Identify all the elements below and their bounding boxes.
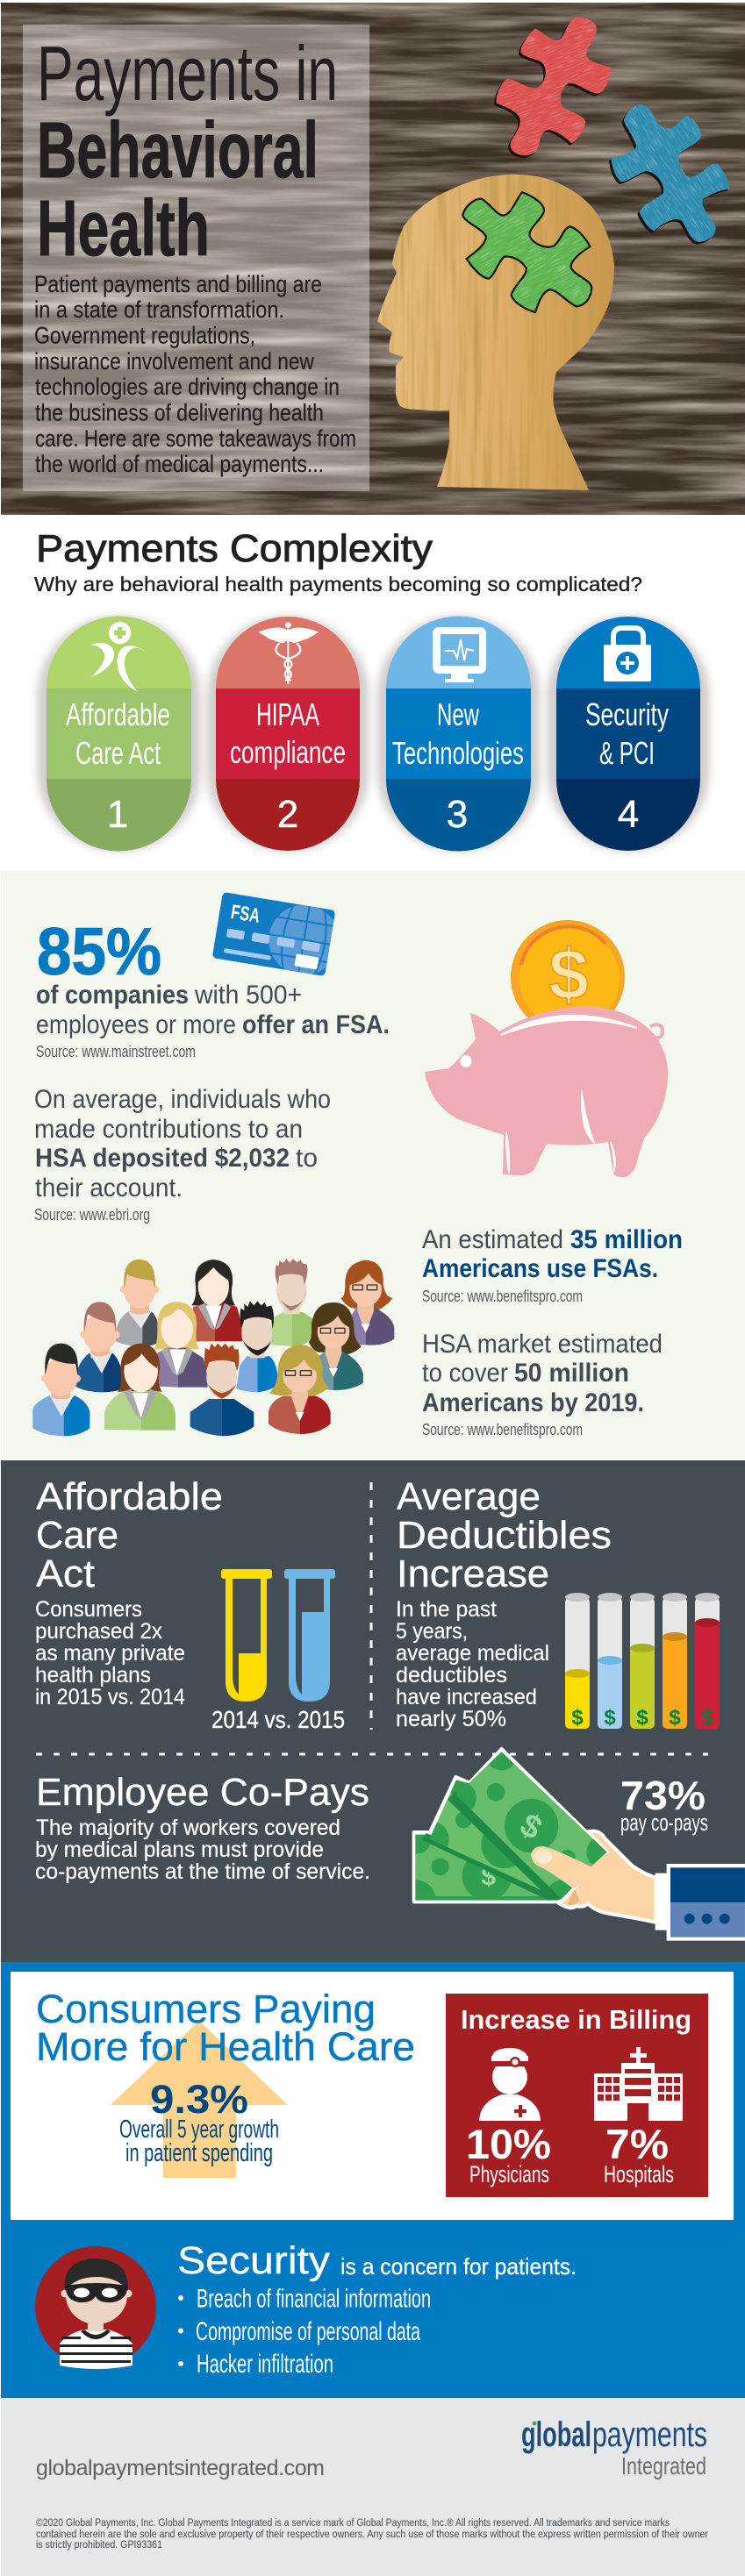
icon: monitor [433, 627, 486, 682]
stat: 85 percent: employees or more [36, 1010, 236, 1039]
stat: hsa deposit: Source: www.ebri.org [34, 1206, 150, 1224]
stat: 85 percent: with 500+ [194, 981, 302, 1010]
text: majority of workers [35, 1816, 370, 1884]
icon: fsa card [212, 893, 335, 975]
title panel [23, 25, 369, 491]
icon: piggy bank with coin [425, 920, 668, 1177]
icon: red puzzle piece [494, 17, 612, 158]
stat: 85 percent: offer an FSA. [242, 1010, 390, 1039]
chart: deductible cylinders: $ [571, 1706, 584, 1730]
chart: test tubes: 2014 vs. 2015 [211, 1706, 345, 1733]
icon: piggy bank with coin: $ [548, 935, 589, 1015]
intro text: technologies are driving change in [35, 374, 340, 400]
intro text: Patient payments and billing are [34, 271, 322, 297]
text: consumers purchased: Consumers [35, 1597, 142, 1622]
chart: deductible cylinders: $ [669, 1706, 681, 1730]
stat: 85 percent: 85% [37, 915, 161, 989]
stat: 9.3 percent [119, 2077, 279, 2167]
title [37, 30, 338, 273]
text: majority of workers: The majority of workers covered [36, 1816, 340, 1840]
list of concerns: Compromise of personal data [196, 2317, 420, 2346]
pill: new technologies: New [437, 696, 480, 732]
text: in the past 5 years: 5 years, [396, 1619, 468, 1644]
stat: 85 percent [36, 915, 390, 1060]
stat: 73 percent [620, 1773, 708, 1836]
title: Behavioral [37, 107, 319, 195]
stat: 50 million: Source: www.benefitspro.com [422, 1421, 583, 1438]
pill: hipaa compliance: compliance [230, 734, 346, 770]
stat: hsa deposit [34, 1085, 331, 1224]
stat: 50 million: HSA market estimated [422, 1330, 663, 1359]
icon: thief [35, 2246, 156, 2369]
stat: 35 million [422, 1225, 683, 1305]
panel: increase in billing: 10% [466, 2121, 551, 2167]
panel: increase in billing: Hospitals [604, 2161, 674, 2187]
pill: affordable care act [38, 617, 200, 851]
icon: blue puzzle piece [609, 104, 730, 245]
list of concerns: Breach of financial information [197, 2284, 431, 2314]
heading: average deductibles increase: Deductibles [397, 1514, 612, 1557]
icon: hospital [594, 2047, 683, 2121]
front bill [456, 1752, 607, 1899]
intro text: the business of delivering health [35, 400, 324, 426]
stat: 50 million: to cover [422, 1359, 508, 1388]
pill: security and pci: & PCI [599, 735, 655, 771]
logo: global [521, 2415, 591, 2454]
pill: affordable care act: 1 [107, 793, 128, 836]
stat: 50 million: Americans by 2019. [422, 1388, 644, 1417]
heading: affordable care act: Care [36, 1514, 118, 1557]
icon: doctor [479, 2048, 541, 2121]
title: Payments in [37, 30, 338, 117]
stat: 85 percent: of companies [36, 981, 189, 1010]
icon: person with plus [90, 622, 147, 691]
heading: More for Health Care [36, 2024, 415, 2069]
text: consumers purchased: as many private [35, 1641, 185, 1666]
back bill: $ [481, 1862, 496, 1891]
pill: hipaa compliance: HIPAA [256, 696, 319, 732]
text: security [177, 2239, 577, 2379]
heading: affordable care act: Affordable [36, 1475, 223, 1518]
stat: hsa deposit: HSA deposited $2,032 [35, 1144, 290, 1173]
heading: average deductibles increase [397, 1475, 612, 1595]
stat: 50 million [422, 1330, 663, 1438]
panel: payments complexity [34, 527, 709, 851]
subheading: Why are behavioral health payments becoming so complicated? [34, 573, 642, 596]
text: majority of workers: co-payments at the time of service. [35, 1859, 370, 1884]
middle bill [430, 1780, 562, 1901]
heading: affordable care act [36, 1475, 223, 1595]
heading: average deductibles increase: Increase [397, 1552, 549, 1595]
middle row of people [75, 1301, 363, 1392]
stat: 35 million: An estimated [422, 1225, 563, 1254]
pill: security and pci: 4 [618, 793, 639, 836]
text: security: Security [177, 2239, 330, 2282]
intro text: in a state of transformation. [34, 296, 284, 323]
pill: hipaa compliance: 2 [277, 793, 298, 836]
text: in the past 5 years: have increased [396, 1685, 537, 1709]
legal text: is strictly prohibited. GPI93361 [36, 2540, 162, 2551]
stat: 85 percent: Source: www.mainstreet.com [36, 1043, 196, 1060]
illustration: group of people [32, 1259, 394, 1436]
pill: new technologies [377, 616, 540, 851]
text: consumers purchased [35, 1597, 185, 1709]
stat: 73 percent: pay co-pays [620, 1809, 708, 1836]
panel: fsa and hsa statistics [1, 871, 745, 1459]
intro text: care. Here are some takeaways from [35, 425, 356, 452]
chart: deductible cylinders: $ [636, 1706, 648, 1730]
icon: caduceus [258, 622, 319, 684]
list of concerns [178, 2284, 431, 2379]
chart: deductible cylinders [565, 1593, 720, 1730]
stat: hsa deposit: made contributions to an [34, 1115, 303, 1144]
text: consumers purchased: in 2015 vs. 2014 [35, 1685, 185, 1709]
pill: affordable care act: Affordable [66, 696, 170, 732]
back row of people [114, 1259, 394, 1346]
front row of people [32, 1344, 331, 1436]
stat: hsa deposit: their account. [35, 1174, 183, 1202]
divider lines [370, 1482, 372, 1730]
stat: 73 percent: 73% [620, 1773, 706, 1818]
text: security: is a concern for patients. [340, 2253, 577, 2280]
panel: increase in billing: Physicians [469, 2161, 549, 2187]
text: in the past 5 years: deductibles [396, 1663, 507, 1688]
panel: increase in billing: Increase in Billing [461, 2004, 691, 2035]
thumb [531, 1846, 608, 1888]
logo [521, 2415, 707, 2480]
illustration: hand with money [395, 1738, 745, 1941]
icon: up arrow [111, 2021, 288, 2178]
intro text: Government regulations, [34, 323, 255, 349]
panel: increase in billing [446, 1994, 708, 2197]
stat: 35 million: 35 million [570, 1225, 683, 1254]
panel: footer [1, 2398, 745, 2576]
text: consumers purchased: purchased 2x [35, 1619, 162, 1644]
pill: security and pci [548, 617, 709, 851]
intro text: insurance involvement and new [34, 348, 314, 375]
text: majority of workers: by medical plans must provide [35, 1837, 324, 1862]
pill: affordable care act: Care Act [75, 735, 161, 771]
title: Health [37, 185, 210, 273]
pill: security and pci: Security [585, 696, 669, 732]
website url: globalpaymentsintegrated.com [36, 2456, 325, 2480]
panel: consumers paying more [1, 1962, 745, 2398]
intro text: the world of medical payments... [35, 451, 324, 477]
text: in the past 5 years: In the past [396, 1597, 497, 1622]
legal text: contained herein are the sole and exclusive property of their respective owners. Any such use of those marks without the express written permission of their owner [36, 2530, 708, 2540]
panel: increase in billing: 7% [605, 2121, 669, 2167]
text: in the past 5 years: average medical [396, 1641, 549, 1666]
heading: average deductibles increase: Average [397, 1475, 541, 1518]
text: in the past 5 years: nearly 50% [396, 1707, 506, 1731]
chart: test tubes [211, 1569, 345, 1733]
panel: dark statistics [1, 1460, 745, 1963]
icon: shirt cuff [655, 1864, 745, 1941]
panel: hero [1, 0, 745, 515]
heading: Consumers Paying [36, 1987, 376, 2031]
stat: hsa deposit: On average, individuals who [34, 1085, 331, 1114]
list of concerns: Hacker infiltration [197, 2350, 333, 2379]
pill: new technologies: Technologies [392, 735, 524, 771]
chart: deductible cylinders: $ [701, 1706, 713, 1730]
front bill: $ [514, 1806, 548, 1846]
logo: payments [592, 2415, 707, 2454]
legal text [36, 2518, 708, 2551]
back bill [415, 1833, 560, 1901]
stat: hsa deposit: to [296, 1144, 318, 1173]
icon: wooden head [373, 171, 619, 496]
heading: Payments Complexity [36, 527, 433, 570]
stat: 9.3 percent: 9.3% [150, 2077, 248, 2122]
heading [36, 1987, 415, 2069]
stat: 35 million: Source: www.benefitspro.com [422, 1288, 583, 1305]
icon: fsa card: FSA [229, 900, 261, 927]
text: consumers purchased: health plans [35, 1663, 151, 1688]
legal text: ©2020 Global Payments, Inc. Global Payments Integrated is a service mark of Global Payments, Inc.® All rights reserved. All trademarks and service marks [36, 2518, 670, 2529]
text: in the past 5 years [396, 1597, 549, 1731]
intro text [34, 271, 356, 477]
hand back [559, 1831, 655, 1923]
stat: 9.3 percent: Overall 5 year growth [119, 2116, 279, 2144]
stat: 9.3 percent: in patient spending [125, 2139, 273, 2167]
icon: green puzzle piece [462, 191, 593, 314]
stat: 35 million: Americans use FSAs. [422, 1254, 658, 1283]
heading: employee co-pays: Employee Co-Pays [36, 1771, 369, 1814]
heading: affordable care act: Act [36, 1552, 95, 1595]
logo: Integrated [621, 2452, 706, 2480]
pill: new technologies: 3 [447, 793, 468, 836]
stat: 50 million: 50 million [514, 1359, 629, 1388]
pill: hipaa compliance [207, 617, 369, 851]
chart: deductible cylinders: $ [604, 1706, 616, 1730]
icon: padlock [604, 628, 651, 681]
